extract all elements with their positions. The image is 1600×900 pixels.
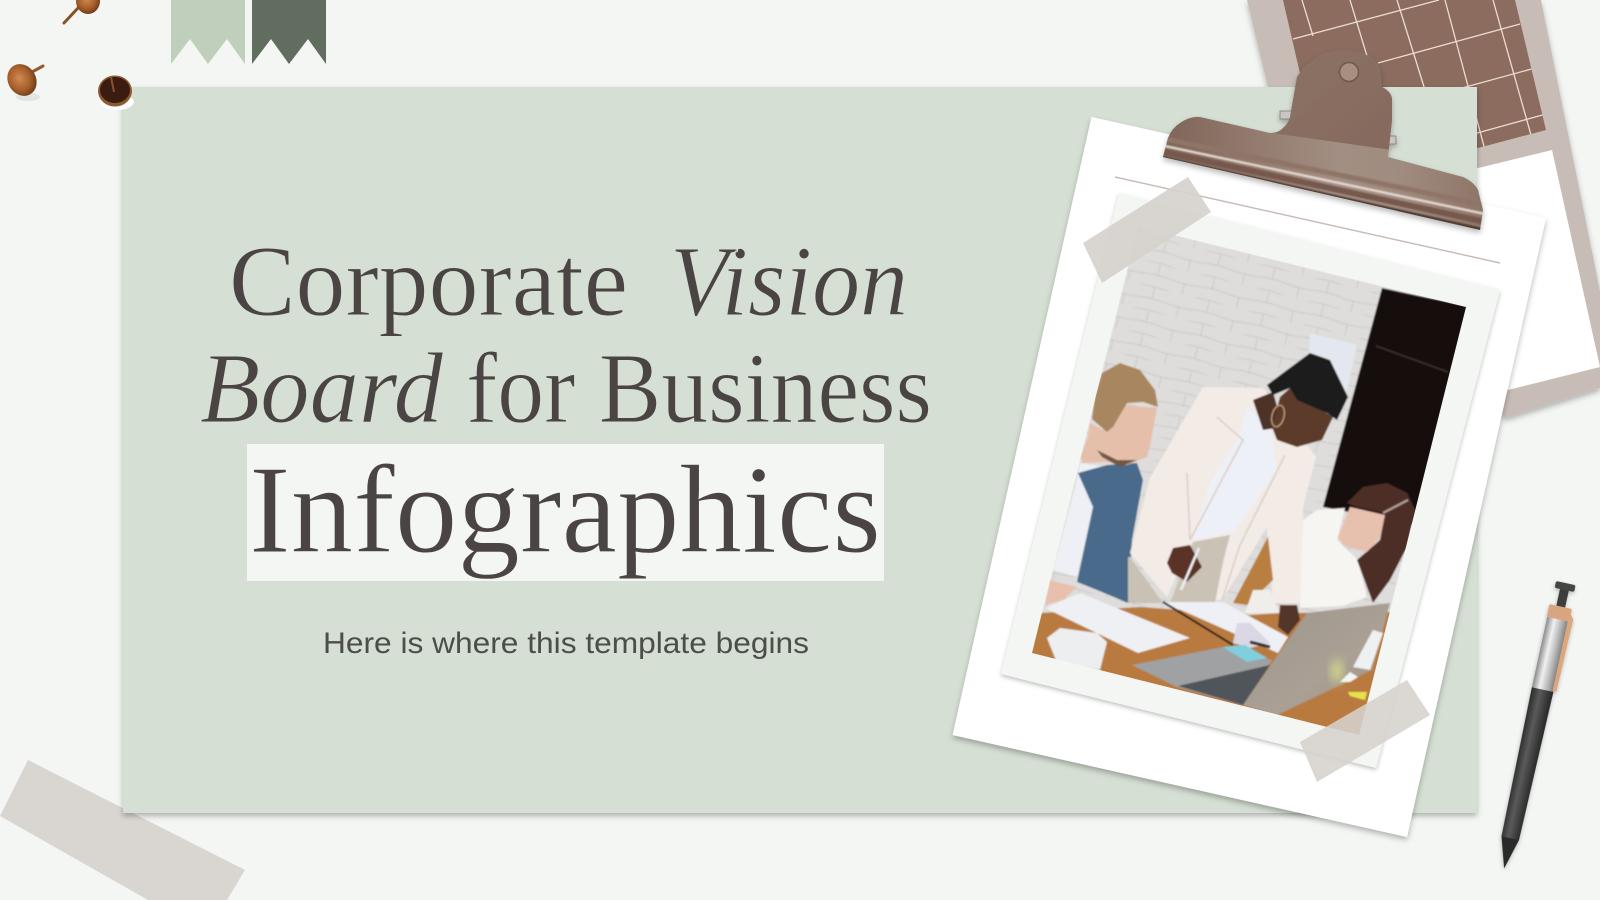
ribbon: light green [171, 0, 245, 64]
open notebook [1045, 593, 1190, 653]
push pins [2, 0, 134, 110]
screen glare [1332, 659, 1342, 683]
title line 1: Corporate [229, 225, 628, 337]
right woman: face [1338, 507, 1385, 552]
taupe backing paper [1247, 0, 1600, 418]
tape: bottom left [0, 760, 245, 900]
woman: neck [1253, 392, 1283, 430]
pen cap [1555, 581, 1576, 592]
man: blue jacket [1077, 463, 1143, 603]
right woman: sweater [1300, 508, 1367, 608]
keyboard [1178, 665, 1270, 705]
man's hand [1045, 580, 1077, 605]
cup [1047, 628, 1107, 670]
pen clip [1553, 614, 1574, 692]
tape: bottom right of photo [1300, 680, 1430, 782]
title line 3: Infographics [249, 441, 881, 580]
clip body [1163, 50, 1483, 230]
title line 1: Vision [670, 225, 908, 337]
paper scrap [1340, 672, 1358, 682]
photo: team meeting [1032, 236, 1466, 735]
woman: braided hair [1267, 353, 1348, 420]
woman: jacket seams [1187, 417, 1285, 600]
title [200, 225, 932, 581]
white object behind table [1245, 590, 1280, 613]
clip rod bands [1160, 138, 1485, 230]
sticky note [1223, 645, 1267, 662]
chair [1233, 537, 1273, 605]
title line 2: for Business [466, 332, 932, 444]
white bottle [1353, 630, 1383, 670]
white note paper [1470, 150, 1600, 390]
clip tab shade [1272, 40, 1400, 150]
ribbon bookmarks [171, 0, 326, 64]
ribbon: dark green [252, 0, 326, 64]
tape: top left of photo [1083, 177, 1211, 283]
hand on paper [1278, 605, 1300, 635]
yellow marker [1348, 692, 1367, 700]
pin: left [2, 59, 43, 101]
document [1163, 602, 1288, 653]
man: neck and face [1080, 405, 1157, 465]
woman: earring [1270, 404, 1286, 428]
brown grid paper [1283, 0, 1546, 160]
right woman: hair parting [1383, 500, 1408, 513]
brick wall [1042, 236, 1437, 616]
right woman: hair [1347, 483, 1415, 603]
black door [1323, 288, 1470, 525]
pin: dark [98, 76, 134, 110]
woman: trousers [1128, 557, 1163, 603]
polaroid frame [1001, 193, 1500, 768]
white clipboard card [953, 117, 1546, 837]
binder clip [1160, 40, 1485, 230]
woman: shirt [1193, 407, 1277, 540]
pen [1492, 581, 1581, 872]
pen in hand [1181, 548, 1199, 590]
pen silver barrel [1532, 616, 1569, 693]
woman: face [1272, 388, 1333, 447]
clip detail [1160, 40, 1485, 230]
subtitle: Here is where this template begins [323, 627, 809, 660]
title line 1 [229, 225, 908, 337]
pen copper band [1547, 604, 1572, 622]
man: hair [1092, 363, 1158, 432]
man: beard [1097, 450, 1137, 467]
card rule line [1115, 177, 1500, 263]
clip hole [1340, 62, 1358, 82]
poster on wall [1309, 333, 1357, 393]
clip pins [1280, 111, 1292, 119]
main green panel [123, 87, 1477, 813]
title line 2: Board [200, 332, 443, 444]
laptop screen [1243, 603, 1390, 715]
woman: hand [1167, 545, 1202, 582]
woman: jacket [1130, 387, 1316, 603]
table [1032, 606, 1390, 735]
pen tip [1495, 836, 1519, 870]
highlight behind Infographics [247, 444, 884, 581]
pen black body [1500, 687, 1553, 840]
pin: top [64, 0, 100, 23]
title line 2 [200, 332, 932, 444]
man: white shirt [1053, 462, 1101, 578]
laptop base [1132, 647, 1272, 705]
